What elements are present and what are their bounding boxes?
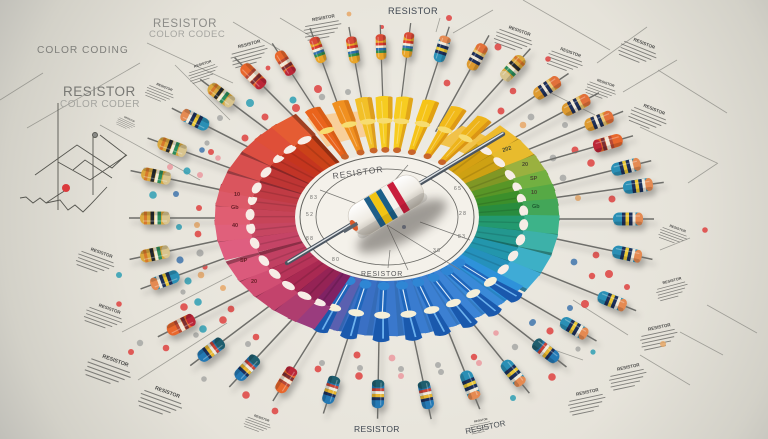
resistor 6	[469, 68, 572, 144]
dial tick marks: 6 5	[454, 186, 461, 192]
line diagram	[20, 103, 127, 212]
resistor 32	[196, 74, 297, 154]
wedges: magenta to red	[214, 114, 358, 329]
heading: resistor color coder	[60, 84, 140, 110]
resistor 21	[317, 307, 363, 415]
heading: bottom right resistor: RESISTOR	[465, 419, 506, 436]
resistor 34	[267, 40, 334, 134]
wedge value labels: 40	[232, 223, 238, 229]
dial label top: RESISTOR	[332, 164, 384, 181]
resistor 17	[451, 299, 534, 397]
resistor 28	[129, 212, 245, 224]
resistor 31	[169, 102, 278, 167]
heading: resistor color codec	[149, 18, 225, 40]
heading: resistor color codec: COLOR CODEC	[149, 29, 225, 40]
colour wheel ring	[214, 96, 560, 343]
wedge value labels: 20	[251, 279, 257, 285]
heading: resistor color coder: RESISTOR	[63, 84, 136, 99]
heading: color coding: COLOR CODING	[37, 45, 129, 56]
yellow backing	[437, 126, 512, 168]
resistor 18	[430, 299, 486, 412]
tapered pieces: orange to yellow	[304, 96, 493, 168]
dial tick marks: 5 2	[306, 212, 313, 218]
wedge value labels: Gb	[532, 204, 540, 210]
dial tick marks: 3 6	[433, 248, 440, 254]
central resistor shadow	[351, 189, 453, 263]
dial tick marks: 2 8	[459, 211, 466, 217]
resistor 36	[344, 26, 373, 131]
scattered colour dots	[116, 12, 708, 414]
central lead wire	[287, 133, 503, 263]
resistor 1	[375, 25, 389, 124]
resistor 24	[186, 291, 287, 371]
resistor 3	[411, 25, 455, 128]
wedges: teal to cyan	[451, 211, 560, 292]
resistor 16	[471, 290, 570, 372]
dial tick marks: 8 3	[458, 234, 465, 240]
resistor 14	[526, 261, 639, 317]
resistor 13	[538, 229, 654, 266]
outer resistors on leads	[128, 22, 665, 420]
resistor 29	[129, 164, 245, 201]
wedge value labels: 10	[234, 192, 240, 198]
heading: resistor color coder: COLOR CODER	[60, 99, 140, 110]
resistor 27	[128, 229, 244, 266]
text blocks	[75, 12, 690, 435]
wedge value labels: 10	[531, 190, 537, 196]
dial tick marks: 8 0	[332, 257, 339, 263]
dial tick marks: 8 3	[310, 195, 317, 201]
resistor 8	[513, 105, 626, 161]
dial tick marks	[306, 186, 466, 263]
resistor 30	[145, 132, 259, 184]
central dial	[295, 153, 479, 281]
resistor 10	[537, 154, 653, 195]
resistor 12	[538, 212, 654, 226]
wedge value labels	[231, 145, 540, 285]
heading: resistor color codec: RESISTOR	[153, 18, 217, 30]
resistor 26	[138, 243, 252, 295]
wedges: blue	[303, 248, 530, 343]
wedge value labels: SP	[240, 258, 248, 264]
central resistor	[334, 170, 429, 245]
wedges: yellow to green	[437, 125, 560, 225]
wedge value labels: 202	[502, 145, 512, 154]
resistor 15	[493, 277, 600, 347]
dial label bottom: RESISTOR	[361, 271, 403, 278]
resistor 4	[430, 32, 494, 135]
resistor 2	[394, 22, 416, 122]
resistor 20	[371, 308, 386, 419]
heading: top resistor: RESISTOR	[388, 6, 438, 16]
wedge value labels: 20	[522, 162, 528, 168]
dial tick marks: 8 8	[306, 236, 313, 242]
wedge value labels: SP	[530, 176, 538, 182]
resistor 7	[493, 87, 602, 153]
wedge value labels: Gb	[231, 205, 239, 211]
resistor 25	[155, 278, 264, 343]
resistor 23	[225, 298, 313, 391]
resistor 35	[305, 26, 351, 128]
resistor 19	[402, 310, 437, 420]
resistor 5	[448, 44, 535, 139]
orange backing	[307, 112, 367, 147]
resistor 9	[520, 130, 635, 174]
heading: bottom resistor: RESISTOR	[354, 424, 400, 434]
resistor 22	[268, 304, 337, 404]
resistor 11	[548, 176, 665, 205]
resistor 33	[230, 53, 321, 144]
